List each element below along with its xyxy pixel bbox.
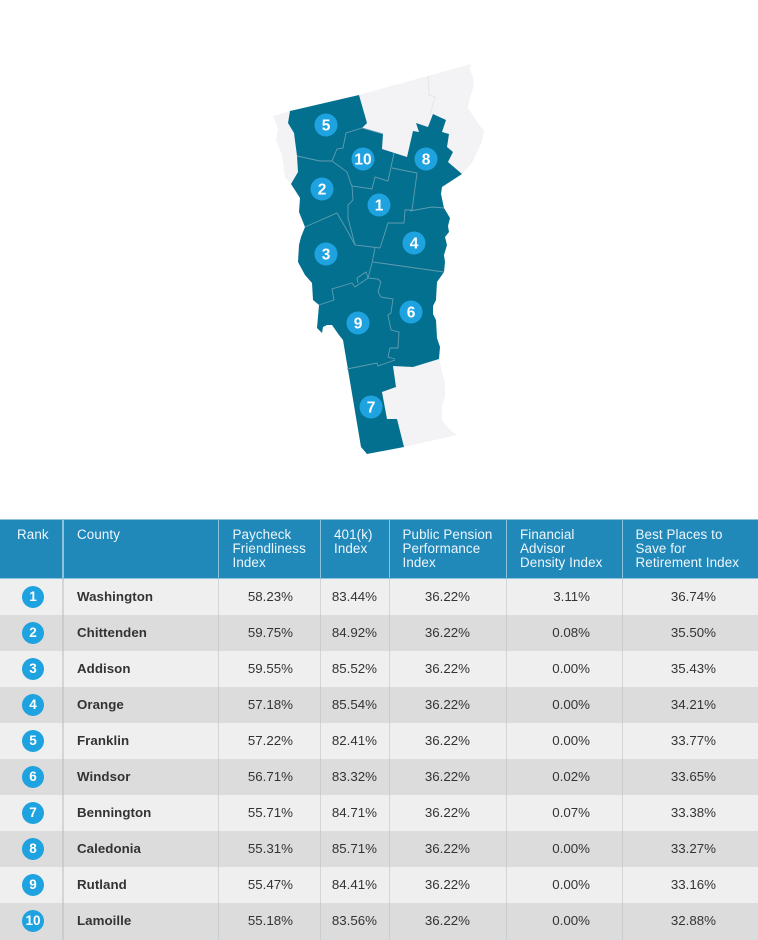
map of Vermont counties bbox=[273, 64, 484, 454]
ranking table bbox=[0, 519, 758, 940]
row 9: Rutland: 36.22% bbox=[425, 877, 470, 892]
row 4: Orange: 0.00% bbox=[552, 697, 590, 712]
row 6: Windsor: Windsor bbox=[77, 769, 130, 784]
row 2: Chittenden: 0.08% bbox=[552, 625, 590, 640]
marker 2: 2 bbox=[318, 182, 326, 198]
row 2: Chittenden: 36.22% bbox=[425, 625, 470, 640]
row 8: Caledonia: 33.27% bbox=[671, 841, 716, 856]
row 10: Lamoille bbox=[0, 903, 758, 940]
row 5: Franklin: 57.22% bbox=[248, 733, 293, 748]
table header: Save for bbox=[636, 541, 686, 556]
row 9: Rutland: 0.00% bbox=[552, 877, 590, 892]
table header: County bbox=[77, 527, 120, 542]
row 6: Windsor: 36.22% bbox=[425, 769, 470, 784]
row 4: Orange: 34.21% bbox=[671, 697, 716, 712]
marker 9: 9 bbox=[354, 316, 363, 332]
row 1: Washington: 3.11% bbox=[553, 589, 590, 604]
row 9: Rutland: 33.16% bbox=[671, 877, 716, 892]
row 1: Washington: 83.44% bbox=[332, 589, 377, 604]
row 7: Bennington: Bennington bbox=[77, 805, 151, 820]
row 2: Chittenden bbox=[0, 615, 758, 651]
row 8: Caledonia: 55.31% bbox=[248, 841, 293, 856]
marker 5: 5 bbox=[322, 118, 331, 134]
row 4: Orange: 36.22% bbox=[425, 697, 470, 712]
county borders bbox=[297, 128, 444, 369]
marker 2 bbox=[310, 178, 334, 200]
marker 8: 8 bbox=[422, 152, 431, 168]
marker 10 bbox=[352, 148, 374, 170]
table header: Retirement Index bbox=[636, 555, 739, 570]
row 3: Addison: 85.52% bbox=[332, 661, 377, 676]
marker 5 bbox=[314, 114, 338, 136]
row 2: Chittenden: Chittenden bbox=[77, 625, 147, 640]
row 3: Addison: 36.22% bbox=[425, 661, 470, 676]
row 5: Franklin: 36.22% bbox=[425, 733, 470, 748]
row 5: Franklin: 33.77% bbox=[671, 733, 716, 748]
row 5: Franklin: 82.41% bbox=[332, 733, 377, 748]
row 10: Lamoille: 32.88% bbox=[671, 913, 716, 928]
marker 3 bbox=[314, 242, 338, 266]
table header: 401(k) bbox=[334, 527, 373, 542]
marker 7: 7 bbox=[367, 400, 375, 416]
marker 1 bbox=[368, 194, 390, 216]
row 4: Orange: Orange bbox=[77, 697, 124, 712]
row 8: Caledonia: 85.71% bbox=[332, 841, 377, 856]
row 9: Rutland: 55.47% bbox=[248, 877, 293, 892]
unranked counties: northwest islands bbox=[273, 111, 298, 184]
marker 6 bbox=[400, 300, 422, 324]
marker 4: 4 bbox=[410, 236, 419, 252]
table header: Financial bbox=[520, 527, 574, 542]
row 10: Lamoille: 0.00% bbox=[552, 913, 590, 928]
row 3: Addison: 3 bbox=[29, 661, 37, 676]
marker 3: 3 bbox=[322, 246, 331, 264]
row 10: Lamoille: 83.56% bbox=[332, 913, 377, 928]
row 8: Caledonia: Caledonia bbox=[77, 841, 141, 856]
table header: Index bbox=[334, 541, 367, 556]
row 7: Bennington: 33.38% bbox=[671, 805, 716, 820]
row 7: Bennington: 7 bbox=[29, 805, 37, 820]
row 9: Rutland bbox=[0, 867, 758, 903]
ranked counties bbox=[288, 95, 462, 454]
marker 9 bbox=[346, 312, 370, 334]
row 1: Washington: 36.74% bbox=[671, 589, 716, 604]
row 5: Franklin: 0.00% bbox=[552, 733, 590, 748]
row 5: Franklin: Franklin bbox=[77, 733, 129, 748]
row 2: Chittenden: 35.50% bbox=[671, 625, 716, 640]
row 4: Orange: 4 bbox=[29, 697, 37, 712]
row 10: Lamoille: 36.22% bbox=[425, 913, 470, 928]
row 7: Bennington: 55.71% bbox=[248, 805, 293, 820]
row 3: Addison: 35.43% bbox=[671, 661, 716, 676]
row 8: Caledonia bbox=[0, 831, 758, 867]
row 8: Caledonia: 0.00% bbox=[552, 841, 590, 856]
table header bbox=[0, 519, 758, 579]
table header: Index bbox=[402, 555, 436, 570]
row 6: Windsor: 33.65% bbox=[671, 769, 716, 784]
row 4: Orange bbox=[0, 687, 758, 723]
marker 8 bbox=[414, 148, 438, 170]
table header: Advisor bbox=[520, 541, 565, 556]
table header: Public Pension bbox=[402, 527, 492, 542]
row 6: Windsor: 83.32% bbox=[332, 769, 377, 784]
row 7: Bennington bbox=[0, 795, 758, 831]
unranked counties: northeast bbox=[359, 64, 484, 174]
table header: Best Places to bbox=[636, 527, 722, 542]
table header: Density Index bbox=[520, 555, 602, 570]
row 1: Washington bbox=[0, 579, 758, 615]
table header: Rank bbox=[17, 527, 49, 542]
table header: Performance bbox=[402, 541, 480, 556]
row 6: Windsor: 56.71% bbox=[248, 769, 293, 784]
table header: Friendliness bbox=[232, 541, 306, 556]
row 2: Chittenden: 2 bbox=[29, 625, 37, 640]
marker 1: 1 bbox=[375, 198, 384, 214]
unranked counties: southeast bbox=[382, 359, 457, 447]
row 10: Lamoille: 10 bbox=[25, 913, 41, 928]
row 4: Orange: 57.18% bbox=[248, 697, 293, 712]
unranked county border bbox=[428, 76, 435, 114]
row 1: Washington: 1 bbox=[29, 589, 37, 604]
row 3: Addison: 59.55% bbox=[248, 661, 293, 676]
row 1: Washington: 58.23% bbox=[248, 589, 293, 604]
row 5: Franklin: 5 bbox=[29, 733, 37, 748]
row 3: Addison: 0.00% bbox=[552, 661, 590, 676]
marker 6: 6 bbox=[407, 304, 416, 322]
marker 7 bbox=[360, 396, 382, 418]
row 10: Lamoille: 55.18% bbox=[248, 913, 293, 928]
row 3: Addison bbox=[0, 651, 758, 687]
row 5: Franklin bbox=[0, 723, 758, 759]
marker 4 bbox=[402, 232, 426, 254]
row 4: Orange: 85.54% bbox=[332, 697, 377, 712]
row 9: Rutland: Rutland bbox=[77, 877, 127, 892]
row 9: Rutland: 84.41% bbox=[332, 877, 377, 892]
row 6: Windsor bbox=[0, 759, 758, 795]
row 8: Caledonia: 36.22% bbox=[425, 841, 470, 856]
row 6: Windsor: 6 bbox=[29, 769, 37, 784]
row 7: Bennington: 0.07% bbox=[552, 805, 590, 820]
row 3: Addison: Addison bbox=[77, 661, 131, 676]
row 7: Bennington: 36.22% bbox=[425, 805, 470, 820]
row 1: Washington: Washington bbox=[77, 589, 153, 604]
row 1: Washington: 36.22% bbox=[425, 589, 470, 604]
table header: Paycheck bbox=[232, 527, 291, 542]
row 2: Chittenden: 84.92% bbox=[332, 625, 377, 640]
row 6: Windsor: 0.02% bbox=[552, 769, 590, 784]
row 2: Chittenden: 59.75% bbox=[248, 625, 293, 640]
row 10: Lamoille: Lamoille bbox=[77, 913, 131, 928]
marker 10: 10 bbox=[354, 152, 372, 168]
row 7: Bennington: 84.71% bbox=[332, 805, 377, 820]
table header: Index bbox=[232, 555, 266, 570]
row 9: Rutland: 9 bbox=[29, 877, 37, 892]
row 8: Caledonia: 8 bbox=[29, 841, 37, 856]
